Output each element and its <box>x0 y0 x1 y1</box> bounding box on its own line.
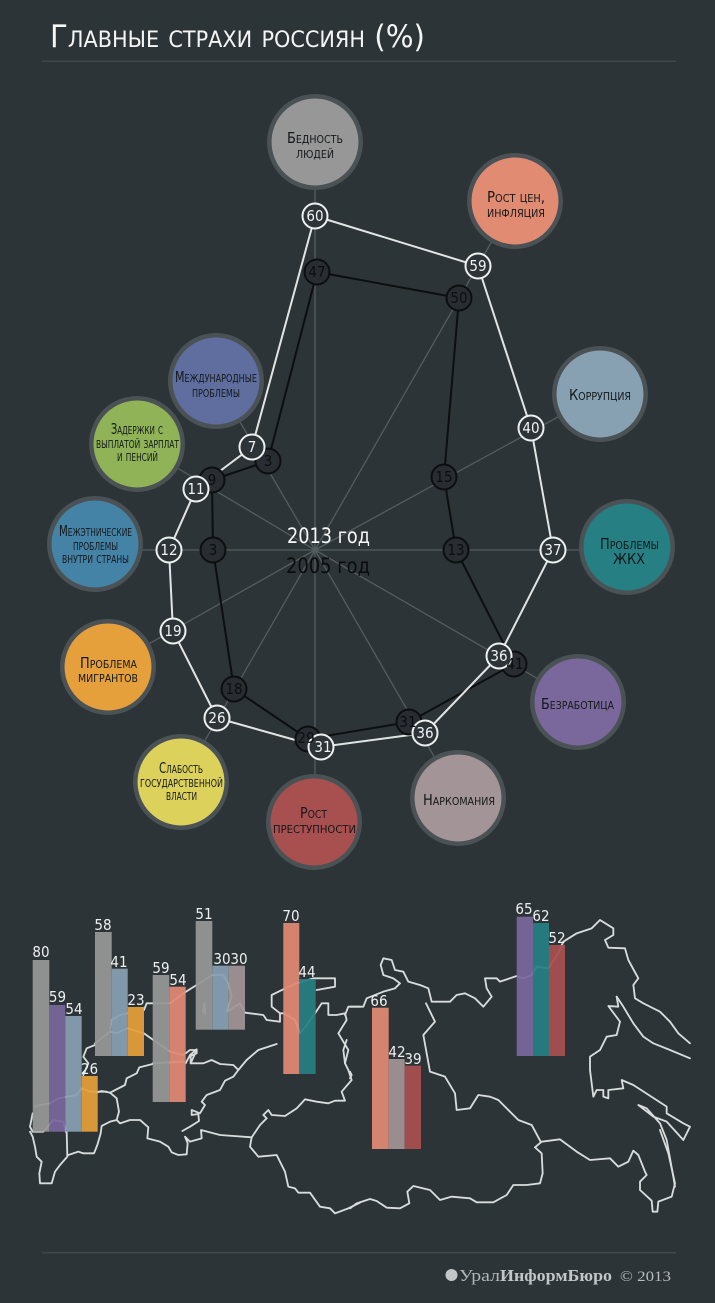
nodes: 2013: 7 <box>248 438 256 456</box>
category: Рост цен, инфляция: Рост цен, <box>487 188 545 206</box>
category: Коррупция <box>554 348 646 440</box>
bar group: region 6 <box>370 992 422 1149</box>
category: Проблемы ЖКХ <box>581 501 673 593</box>
nodes: 2013: 36 <box>490 647 508 665</box>
category: Межэтнические проблемы внутри страны <box>49 498 141 590</box>
footer credit <box>446 1266 671 1285</box>
bar group: region 5: 44 <box>298 963 316 981</box>
bar group: region 5: 70 <box>282 907 300 925</box>
category: Проблемы ЖКХ: Проблемы <box>600 535 659 553</box>
bar group: region 7: 65 <box>515 900 533 918</box>
bar group: region 4: 30 <box>213 950 231 968</box>
category: Рост преступности <box>268 776 360 868</box>
bar group: region 1: 59 <box>49 988 66 1006</box>
category: Межэтнические проблемы внутри страны: внутри страны <box>62 549 129 567</box>
category: Наркомания <box>412 752 504 844</box>
nodes: 2005: 18 <box>225 680 243 698</box>
nodes: 2005: 3 <box>209 541 217 559</box>
nodes: 2005: 13 <box>447 541 465 559</box>
category: Безработица: Безработица <box>541 695 614 713</box>
category: Бедность людей: людей <box>296 144 334 162</box>
category: Задержки с выплатой зарплат и пенсий <box>91 398 183 490</box>
bar group: region 7: 62 <box>532 907 550 925</box>
category: Межэтнические проблемы внутри страны: Межэтнические <box>59 522 132 540</box>
footer credit: © 2013 <box>620 1269 671 1285</box>
nodes: 2013: 36 <box>416 724 434 742</box>
bar group: region 4: 51 <box>195 905 213 923</box>
bar group: region 6: 42 <box>388 1043 406 1061</box>
bar group: region 1 <box>32 943 98 1132</box>
bar group: region 1: 26 <box>81 1060 98 1078</box>
legend: 2013 год: 2013 год <box>287 524 370 548</box>
category: Проблема мигрантов <box>62 621 154 713</box>
category: Бедность людей <box>269 96 361 188</box>
category: Проблема мигрантов: Проблема <box>80 654 137 672</box>
category: Задержки с выплатой зарплат и пенсий: и пенсий <box>117 447 158 465</box>
line: 2013 values <box>169 216 553 747</box>
nodes: 2013: 12 <box>160 541 178 559</box>
category: Задержки с выплатой зарплат и пенсий: Задержки с <box>111 420 163 438</box>
bar group: region 1: 80 <box>32 943 50 961</box>
map of Russia <box>30 920 690 1213</box>
legend: 2005 год: 2005 год <box>286 554 370 578</box>
category: Международные проблемы: проблемы <box>192 383 240 401</box>
title: Главные страхи россиян (%) <box>50 19 425 55</box>
category: Рост преступности: Рост <box>300 804 328 822</box>
category: Рост цен, инфляция: инфляция <box>487 203 545 221</box>
bar group: region 4 <box>195 905 248 1030</box>
bar group: region 2 <box>94 916 145 1056</box>
category: Межэтнические проблемы внутри страны: проблемы <box>73 536 118 554</box>
bar group: region 1: 54 <box>65 1000 83 1018</box>
bar group: region 5 <box>282 907 316 1074</box>
bar group: region 3: 54 <box>169 971 187 989</box>
category: Слабость государственной власти: Слабость <box>159 759 203 777</box>
nodes: 2005: 15 <box>435 468 453 486</box>
nodes: 2013: 11 <box>187 480 205 498</box>
bar group: region 2: 41 <box>110 953 128 971</box>
category: Слабость государственной власти: власти <box>166 786 197 804</box>
overlapping 2005 values: 29 <box>297 729 315 747</box>
category: Коррупция: Коррупция <box>569 386 631 404</box>
categories <box>49 96 673 868</box>
nodes: 2013 <box>156 204 566 760</box>
overlapping 2005 values: 9 <box>208 471 216 489</box>
nodes: 2013: 59 <box>469 257 487 275</box>
radar chart <box>49 96 673 868</box>
line: 2005 values <box>212 272 514 739</box>
nodes: 2013: 37 <box>544 541 562 559</box>
category: Слабость государственной власти <box>135 736 227 828</box>
bar group: region 7 <box>515 900 566 1056</box>
nodes: 2013: 19 <box>164 622 182 640</box>
bar group: region 2: 23 <box>127 991 145 1009</box>
overlapping 2005 values: 31 <box>399 713 417 731</box>
nodes: 2013: 60 <box>306 207 324 225</box>
nodes: 2005: 50 <box>450 289 468 307</box>
nodes: 2013: 40 <box>522 419 540 437</box>
category: Международные проблемы: Международные <box>175 368 257 386</box>
bar group: region 6: 66 <box>370 992 388 1010</box>
category: Безработица <box>532 656 624 748</box>
bar group: region 2: 58 <box>94 916 112 934</box>
category: Наркомания: Наркомания <box>423 791 495 809</box>
bar group: region 7: 52 <box>548 929 566 947</box>
category: Слабость государственной власти: государственной <box>140 773 223 791</box>
bar group: region 6: 39 <box>404 1050 422 1068</box>
nodes: 2005: 47 <box>308 263 326 281</box>
category: Международные проблемы <box>170 335 262 427</box>
footer credit: ИнформБюро <box>500 1266 612 1285</box>
bar group: region 3 <box>152 959 187 1102</box>
category: Проблемы ЖКХ: ЖКХ <box>613 550 645 568</box>
category: Проблема мигрантов: мигрантов <box>78 668 138 686</box>
category: Бедность людей: Бедность <box>287 129 343 147</box>
category: Рост цен, инфляция <box>469 155 561 247</box>
footer credit: Урал <box>459 1266 501 1285</box>
nodes: 2013: 31 <box>314 738 332 756</box>
overlapping 2005 values <box>208 471 524 747</box>
bar group: region 3: 59 <box>152 959 170 977</box>
nodes: 2013: 26 <box>208 709 226 727</box>
bar group: region 4: 30 <box>230 950 248 968</box>
nodes: 2005 <box>200 260 526 752</box>
category: Задержки с выплатой зарплат и пенсий: выплатой зарплат <box>96 434 180 452</box>
nodes: 2005: 3 <box>264 452 272 470</box>
spokes <box>95 142 627 822</box>
overlapping 2005 values: 41 <box>506 655 524 673</box>
category: Рост преступности: преступности <box>273 819 356 837</box>
